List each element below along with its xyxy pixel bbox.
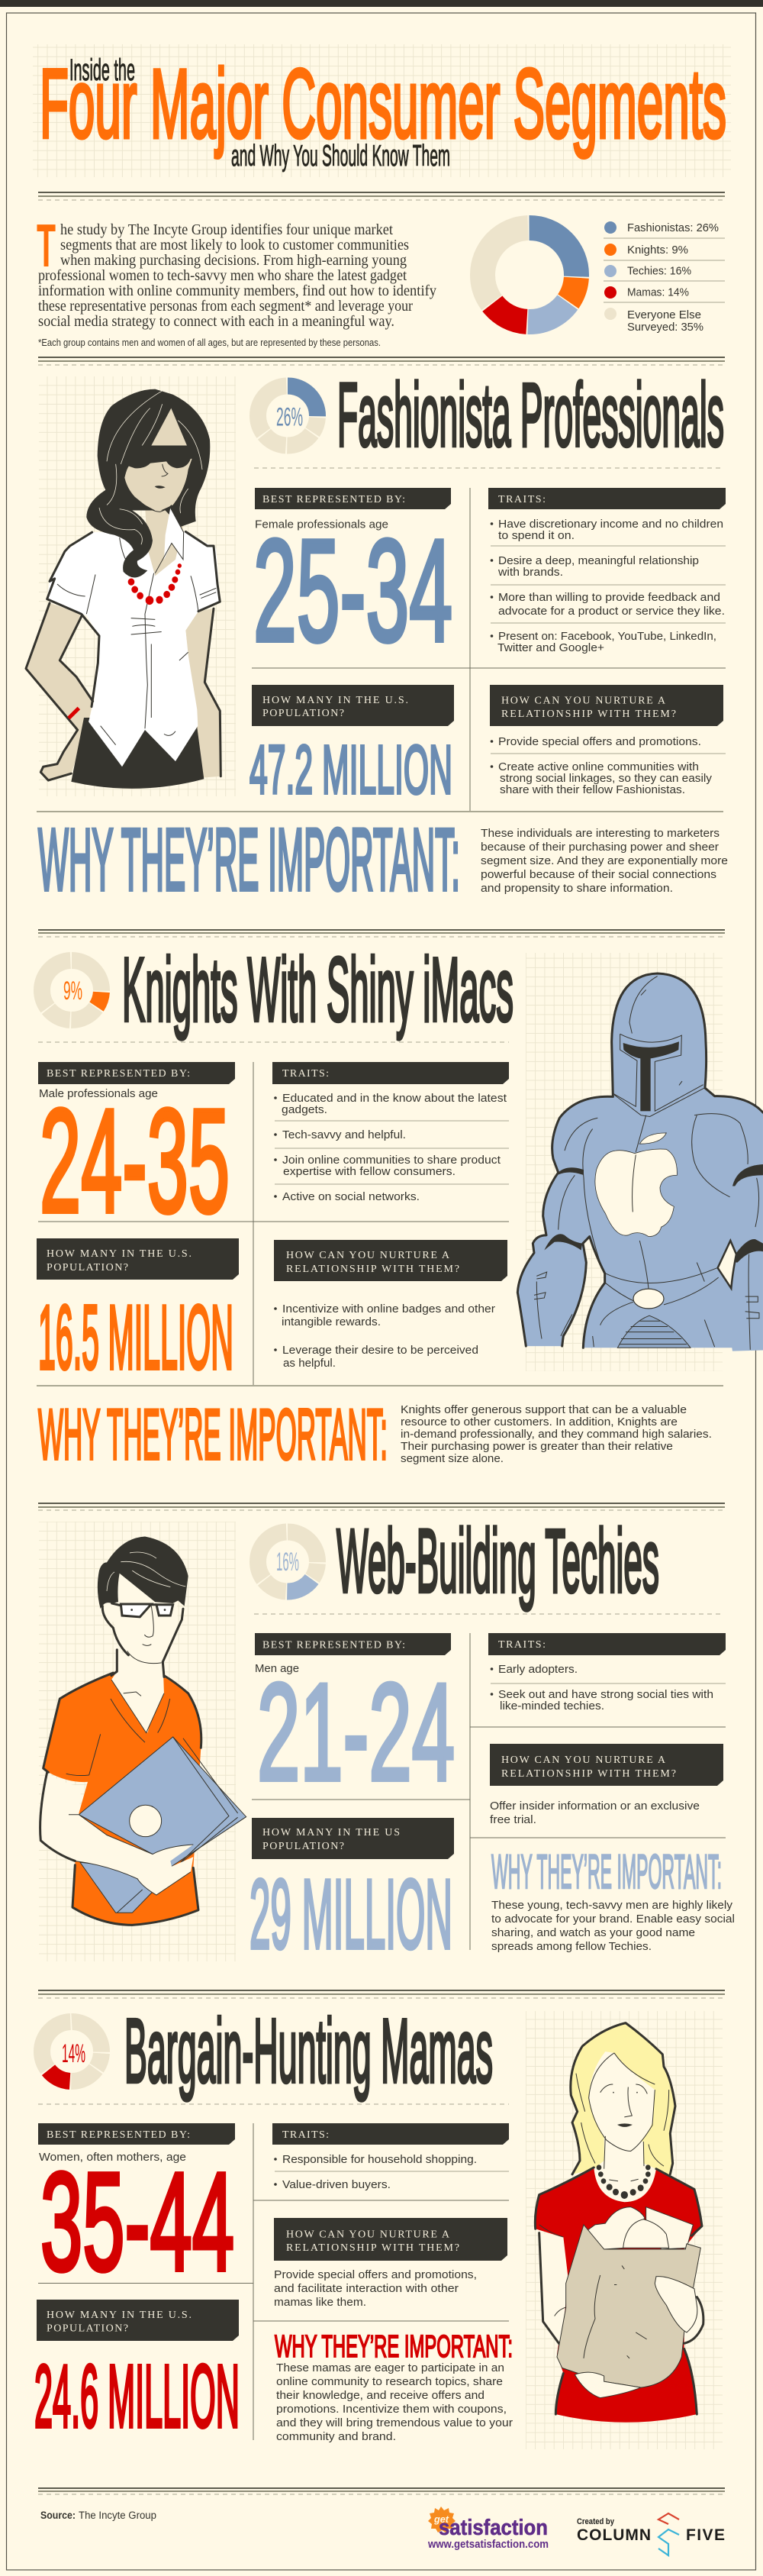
head <box>105 1570 178 1664</box>
title block: and Why You Should Know Them <box>231 140 450 173</box>
nurture list: strong social linkages, so they can easily <box>500 772 713 785</box>
big number: age range: 25-34 <box>253 510 452 672</box>
panel: knights with shiny imacs: 16.5 MILLION <box>38 1287 233 1388</box>
big number: age range: 35-44 <box>40 2143 234 2300</box>
label bar: how many <box>252 1818 454 1859</box>
why text: to advocate for your brand. Enable easy social <box>491 1913 735 1926</box>
nurture text: Provide special offers and promotions, <box>274 2268 477 2281</box>
paper bag <box>557 2225 700 2387</box>
intro text block: segments that are most likely to look to customer communities <box>60 237 409 253</box>
small donut: 26% <box>258 386 317 446</box>
label bar: how many <box>37 1238 239 1280</box>
logo: get satisfaction: www.getsatisfaction.com <box>427 2539 549 2551</box>
label bar: how many <box>252 685 454 726</box>
label bar: nurture: HOW CAN YOU NURTURE A <box>501 1754 666 1766</box>
source note: The Incyte Group <box>79 2510 156 2521</box>
nurture text: and facilitate interaction with other <box>274 2282 459 2295</box>
traits list <box>274 2153 509 2191</box>
why text: Their purchasing power is greater than their relative <box>401 1440 673 1453</box>
traits list: like-minded techies. <box>500 1700 604 1712</box>
intro text block <box>37 211 436 348</box>
illustration: techie <box>40 1536 246 1925</box>
label bar: how many <box>37 2300 239 2341</box>
age text: Women, often mothers, age <box>39 2151 186 2164</box>
logo: get satisfaction: get <box>433 2513 449 2525</box>
traits list: gadgets. <box>282 1103 327 1116</box>
traits list <box>274 1092 509 1203</box>
why text: segment size alone. <box>401 1452 504 1465</box>
label bar: traits: TRAITS: <box>498 1639 546 1651</box>
label bar: best represented by: BEST REPRESENTED BY: <box>262 494 405 505</box>
traits list: Seek out and have strong social ties with <box>498 1688 713 1701</box>
why text <box>401 1403 712 1465</box>
traits list: Twitter and Google+ <box>497 641 604 654</box>
label bar: best represented by: BEST REPRESENTED BY: <box>262 1640 405 1651</box>
nurture text: free trial. <box>490 1813 536 1826</box>
nurture text: Offer insider information or an exclusive <box>490 1800 700 1813</box>
label bar: nurture: HOW CAN YOU NURTURE A <box>286 1250 450 1261</box>
label bar: best represented by <box>255 1633 451 1655</box>
donut legend: Everyone Else <box>627 308 701 321</box>
label bar: best represented by: BEST REPRESENTED BY: <box>47 2129 190 2141</box>
hair <box>571 2023 675 2174</box>
donut chart: survey share <box>482 228 577 322</box>
nurture list: as helpful. <box>283 1357 336 1370</box>
traits list: Join online communities to share product <box>282 1154 501 1167</box>
traits list: Tech-savvy and helpful. <box>282 1128 406 1141</box>
arms <box>40 1772 193 1895</box>
why text <box>481 827 728 895</box>
arm joints <box>544 1164 763 1263</box>
traits list <box>491 518 726 654</box>
nurture list: intangible rewards. <box>282 1315 381 1328</box>
source note: Source: <box>40 2510 76 2521</box>
intro text block: these representative personas from each segment* and leverage your <box>38 299 413 315</box>
small donut: 16% <box>258 1532 317 1591</box>
face <box>589 2051 655 2151</box>
hair <box>86 389 210 578</box>
nurture list: share with their fellow Fashionistas. <box>500 783 685 796</box>
why text: because of their purchasing power and sheer <box>481 841 719 854</box>
panel: fashionista professionals <box>26 365 728 909</box>
hair <box>98 1536 188 1609</box>
label bar: traits <box>488 1633 726 1655</box>
nurture list: Create active online communities with <box>498 760 699 773</box>
arms <box>539 2233 568 2346</box>
why text: their knowledge, and receive offers and <box>276 2389 485 2402</box>
why text: sharing, and watch as your good name <box>491 1926 695 1939</box>
why text: segment size. And they are exponentially more <box>481 854 728 867</box>
groceries <box>588 2207 645 2249</box>
logo: column five: COLUMN <box>577 2526 651 2544</box>
hands <box>655 2277 697 2332</box>
why text: online community to research topics, share <box>276 2375 503 2388</box>
logo: column five: FIVE <box>686 2526 725 2544</box>
why text: These mamas are eager to participate in an <box>276 2361 504 2374</box>
collar <box>164 508 184 560</box>
traits list: Value-driven buyers. <box>282 2178 391 2191</box>
panel: bargain-hunting mamas: 24.6 MILLION <box>34 2347 240 2446</box>
traits list: Present on: Facebook, YouTube, LinkedIn, <box>498 630 716 643</box>
small donut: 14%: 14% <box>62 2039 85 2068</box>
label bar: nurture: RELATIONSHIP WITH THEM? <box>286 1264 459 1275</box>
glasses <box>121 1604 151 1617</box>
donut legend: Mamas: 14% <box>627 286 689 299</box>
traits list: Educated and in the know about the latest <box>282 1092 507 1105</box>
label bar: traits <box>488 488 726 509</box>
donut legend: Knights: 9% <box>627 244 688 257</box>
label bar: nurture <box>274 2218 507 2261</box>
donut legend: Techies: 16% <box>627 264 691 278</box>
label bar: nurture: HOW CAN YOU NURTURE A <box>286 2229 450 2240</box>
laptop <box>79 1737 246 1867</box>
belt buckle <box>633 1289 664 1309</box>
panel: bargain-hunting mamas <box>34 2000 723 2449</box>
intro text block: information with online community members, find out how to identify <box>38 283 436 299</box>
title block: Inside the <box>69 53 135 87</box>
traits list: to spend it on. <box>498 529 575 542</box>
traits list: expertise with fellow consumers. <box>283 1165 456 1178</box>
why text: spreads among fellow Techies. <box>491 1940 652 1953</box>
shirt <box>535 2168 702 2423</box>
why they are important heading: WHY THEY’RE IMPORTANT: <box>275 2329 513 2364</box>
why text: Knights offer generous support that can be a valuable <box>401 1403 687 1416</box>
small donut: 16%: 16% <box>276 1548 299 1577</box>
why text: community and brand. <box>276 2430 396 2443</box>
age text: Female professionals age <box>255 518 388 531</box>
small donut: 14% <box>42 2022 101 2081</box>
drop cap: T <box>37 211 56 279</box>
label bar: nurture <box>274 1240 507 1281</box>
why text <box>491 1899 735 1953</box>
nurture list: Leverage their desire to be perceived <box>282 1344 478 1357</box>
logo: column five <box>577 2513 725 2555</box>
label bar: best represented by: BEST REPRESENTED BY: <box>47 1068 190 1080</box>
title block <box>33 44 731 177</box>
apple logo <box>595 1149 677 1237</box>
neck <box>111 1652 164 1733</box>
label bar: best represented by <box>255 488 451 509</box>
nurture text <box>274 2268 477 2309</box>
face <box>151 408 187 446</box>
intro text block: social media strategy to connect with each in a meaningful way. <box>38 314 394 330</box>
why text: powerful because of their social connections <box>481 868 716 881</box>
nurture text <box>490 1800 700 1826</box>
nurture list: Provide special offers and promotions. <box>498 735 701 748</box>
traits list: Early adopters. <box>498 1663 578 1676</box>
label bar: traits: TRAITS: <box>498 494 546 505</box>
traits list: Have discretionary income and no children <box>498 518 723 531</box>
donut legend: Fashionistas: 26% <box>627 221 719 234</box>
intro text block: he study by The Incyte Group identifies four unique market <box>60 222 394 238</box>
label bar: nurture: RELATIONSHIP WITH THEM? <box>501 709 676 720</box>
label bar: traits <box>272 2123 509 2145</box>
label bar: traits: TRAITS: <box>282 1068 329 1080</box>
nurture list <box>491 735 726 796</box>
label bar: best represented by <box>38 1062 235 1084</box>
label bar: nurture <box>490 1744 723 1786</box>
sunglasses <box>124 446 192 468</box>
label bar: how many: POPULATION? <box>47 2323 128 2335</box>
label bar: how many: POPULATION? <box>262 1841 344 1852</box>
logo: column five: Created by <box>577 2517 615 2526</box>
why text: These individuals are interesting to marketers <box>481 827 720 840</box>
big number: age range: 24-35 <box>40 1078 230 1243</box>
necklace <box>128 563 182 605</box>
traits list: Responsible for household shopping. <box>282 2153 477 2166</box>
nurture text: mamas like them. <box>274 2296 366 2309</box>
label bar: how many: POPULATION? <box>47 1262 128 1273</box>
why text <box>276 2361 513 2443</box>
label bar: how many: HOW MANY IN THE U.S. <box>262 695 408 706</box>
label bar: how many: HOW MANY IN THE U.S. <box>47 1248 192 1260</box>
panel: knights with shiny imacs <box>37 939 763 1474</box>
traits list: with brands. <box>497 566 563 579</box>
illustration: fashionista <box>26 389 221 789</box>
intro text block: *Each group contains men and women of all ages, but are represented by these personas. <box>38 337 381 348</box>
label bar: nurture <box>490 685 723 726</box>
small donut: 9%: 9% <box>63 976 82 1006</box>
traits list: advocate for a product or service they like. <box>498 605 725 618</box>
nurture list <box>274 1303 495 1370</box>
helmet visor <box>623 1041 679 1111</box>
bracelet <box>69 708 79 718</box>
label bar: nurture: RELATIONSHIP WITH THEM? <box>286 2242 459 2254</box>
traits list: More than willing to provide feedback and <box>498 591 720 604</box>
big number: age range: 21-24 <box>257 1655 455 1809</box>
why text: and they will bring tremendous value to your <box>276 2416 513 2429</box>
label bar: nurture: RELATIONSHIP WITH THEM? <box>501 1768 676 1780</box>
label bar: nurture: HOW CAN YOU NURTURE A <box>501 695 666 707</box>
panel: web-building techies <box>39 1511 735 1970</box>
label bar: how many: POPULATION? <box>262 708 344 719</box>
why text: These young, tech-savvy men are highly likely <box>491 1899 733 1912</box>
intro text block: professional women to tech-savvy men who share the latest gadget <box>38 268 407 284</box>
source note <box>40 2510 156 2521</box>
age text: Male professionals age <box>39 1087 158 1100</box>
illustration: mama <box>535 2023 703 2423</box>
necklace <box>597 2164 651 2199</box>
why text: in-demand professionally, and they command high salaries. <box>401 1428 712 1441</box>
abdomen stripes <box>617 1315 691 1348</box>
illustration: knight <box>517 973 763 1351</box>
why text: resource to other customers. In addition, Knights are <box>401 1416 678 1428</box>
why text: promotions. Incentivize them with coupons, <box>276 2403 507 2416</box>
small donut: 26%: 26% <box>276 403 303 432</box>
small donut: 9% <box>42 960 101 1020</box>
label bar: how many: HOW MANY IN THE U.S. <box>47 2310 192 2321</box>
traits list: Desire a deep, meaningful relationship <box>498 554 699 567</box>
age text: Men age <box>255 1662 299 1675</box>
label bar: how many: HOW MANY IN THE US <box>262 1827 400 1838</box>
why text: and propensity to share information. <box>481 882 673 895</box>
logo: get satisfaction <box>427 2507 549 2551</box>
intro text block: when making purchasing decisions. From high-earning young <box>60 253 407 269</box>
traits list <box>491 1663 726 1712</box>
traits list: Active on social networks. <box>282 1190 420 1203</box>
label bar: traits <box>272 1062 509 1084</box>
label bar: traits: TRAITS: <box>282 2129 329 2141</box>
label bar: best represented by <box>38 2123 235 2145</box>
panel: fashionista professionals: 47.2 MILLION <box>250 732 452 809</box>
donut legend: Surveyed: 35% <box>627 321 703 334</box>
nurture list: Incentivize with online badges and other <box>282 1303 495 1315</box>
logo: get satisfaction: satisfaction <box>439 2516 548 2540</box>
donut legend <box>604 221 725 334</box>
